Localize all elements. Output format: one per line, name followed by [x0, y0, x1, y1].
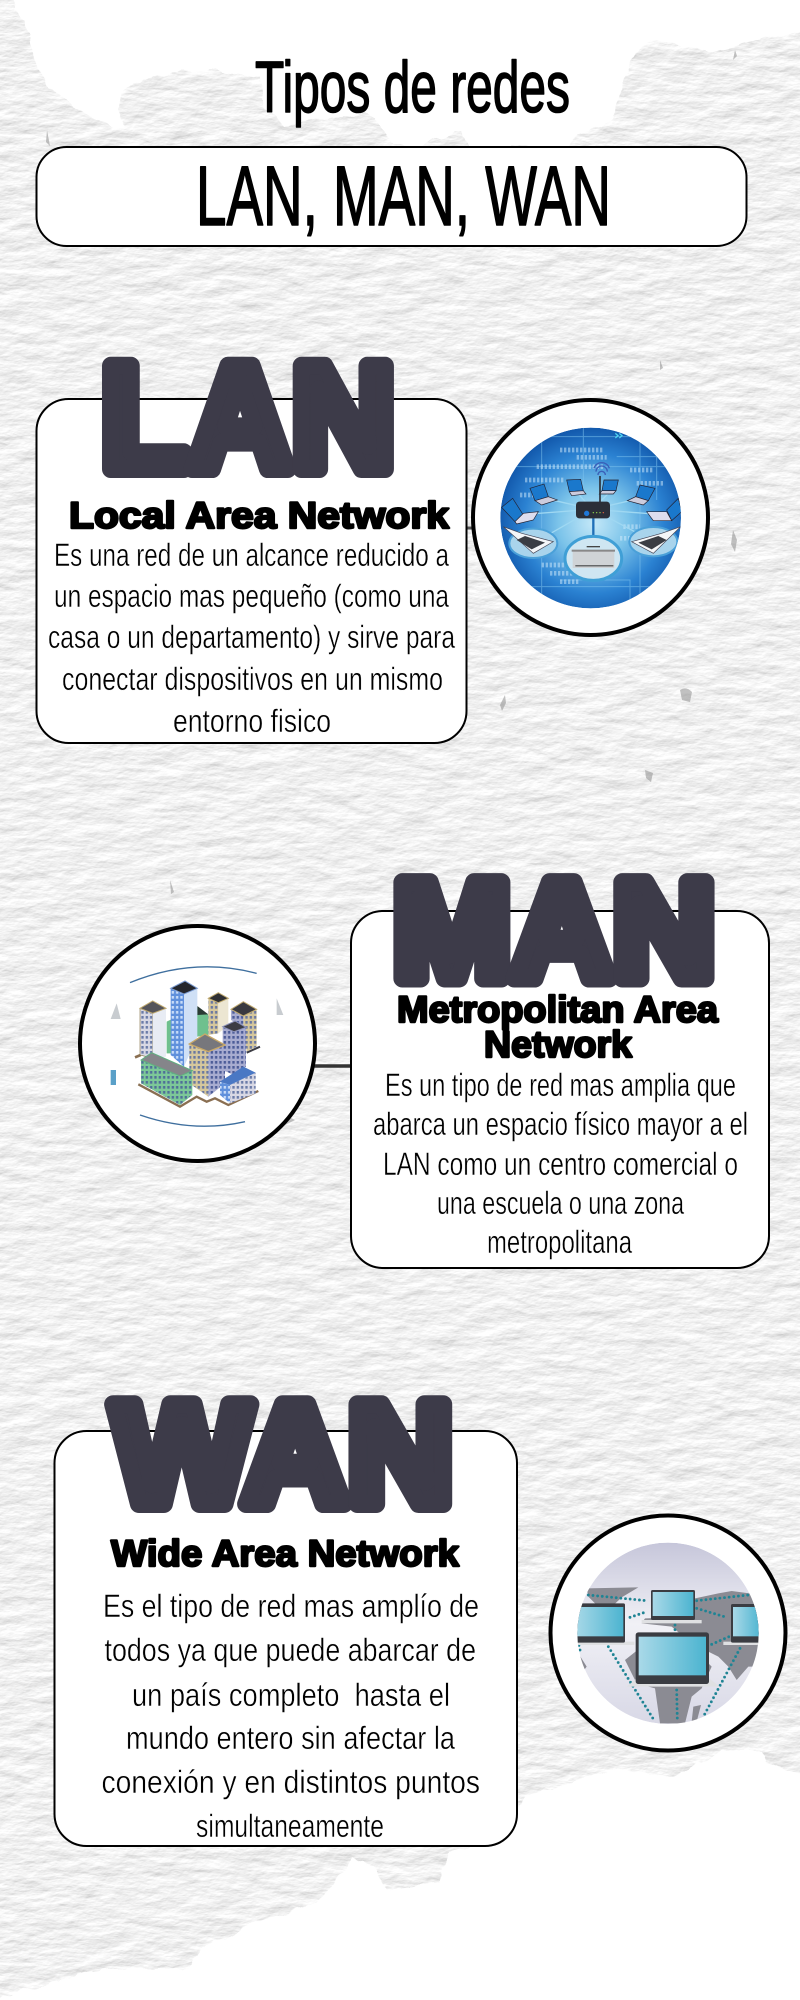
- connector: LAN: [466, 526, 474, 530]
- WAN description: simultaneamente: [196, 1808, 384, 1844]
- icon: LAN network circle: [473, 400, 708, 635]
- LAN description: [48, 537, 455, 739]
- MAN description: [373, 1067, 748, 1260]
- LAN description: un espacio mas pequeño (como una: [54, 578, 449, 614]
- icon: MAN city buildings circle: [80, 926, 315, 1161]
- WAN description: todos ya que puede abarcar de: [104, 1632, 476, 1668]
- connector: MAN: [314, 1064, 352, 1068]
- WAN subheading: Wide Area Network: [111, 1533, 459, 1574]
- WAN description: mundo entero sin afectar la: [126, 1720, 455, 1756]
- WAN description: un país completo hasta el: [132, 1677, 450, 1713]
- WAN card: [54, 1431, 517, 1846]
- LAN description: entorno fisico: [173, 703, 331, 739]
- LAN subheading: Local Area Network: [69, 495, 449, 536]
- MAN big heading: MAN: [393, 852, 715, 1008]
- title: Tipos de redes: [255, 48, 570, 128]
- LAN card: [36, 399, 466, 743]
- LAN description: Es una red de un alcance reducido a: [54, 537, 449, 573]
- WAN description: [102, 1588, 480, 1844]
- MAN description: una escuela o una zona: [437, 1185, 684, 1221]
- MAN subheading: Network: [484, 1024, 632, 1065]
- MAN subheading: [397, 989, 718, 1065]
- icon: WAN world laptops circle: [550, 1516, 786, 1750]
- banner box: [36, 147, 746, 246]
- panel: LAN: [36, 333, 708, 743]
- WAN description: conexión y en distintos puntos: [102, 1764, 480, 1800]
- MAN description: metropolitana: [487, 1224, 632, 1260]
- LAN big heading: LAN: [101, 333, 395, 501]
- panel: WAN: [54, 1373, 786, 1846]
- MAN card: [351, 911, 769, 1268]
- WAN description: Es el tipo de red mas amplío de: [103, 1588, 479, 1624]
- LAN description: casa o un departamento) y sirve para: [48, 619, 455, 655]
- WAN big heading: WAN: [113, 1373, 453, 1535]
- panel: MAN: [80, 852, 769, 1268]
- LAN description: conectar dispositivos en un mismo: [62, 661, 443, 697]
- MAN subheading: Metropolitan Area: [397, 989, 718, 1030]
